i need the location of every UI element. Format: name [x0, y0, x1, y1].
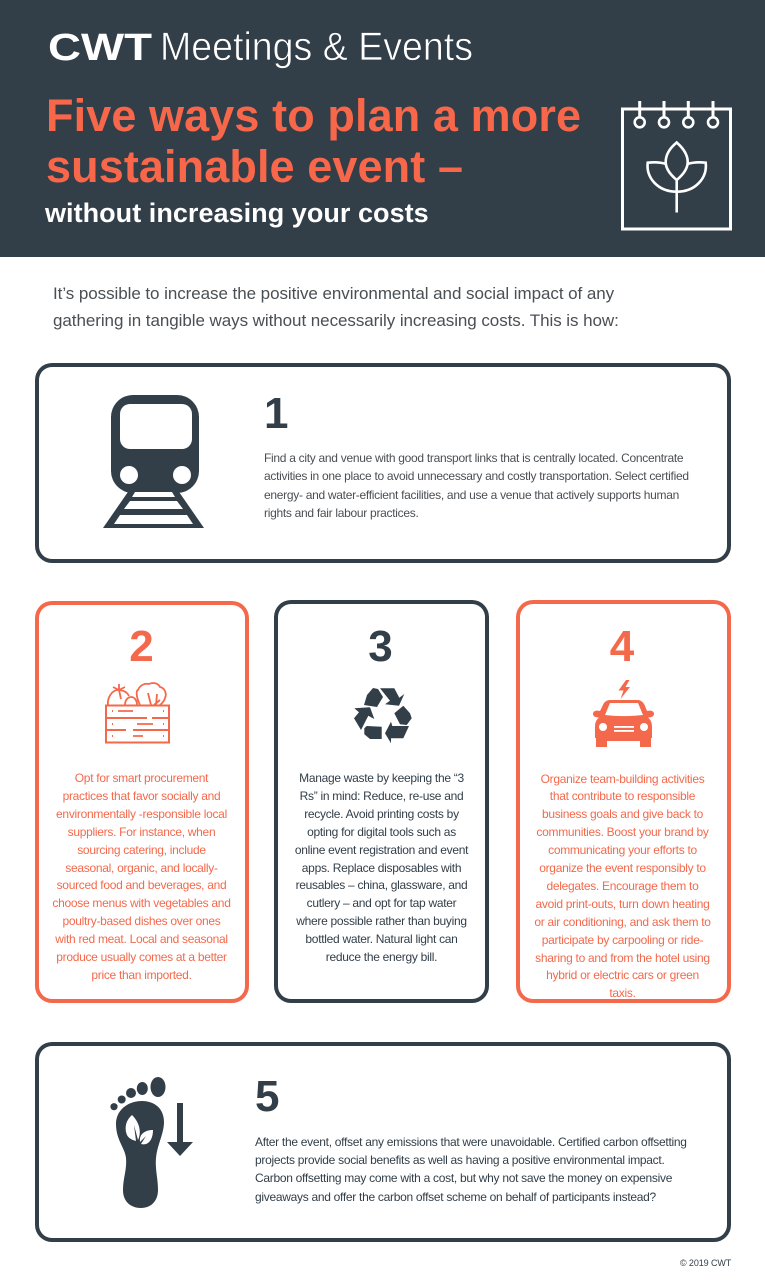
body text 4: taxis. — [609, 986, 636, 1000]
body text 2: Opt for smart procurement — [75, 771, 208, 785]
body text 2: environmentally -responsible local — [56, 807, 227, 821]
body text 1: energy- and water-efficient facilities, and use a venue that actively supports human — [264, 488, 679, 502]
body text 1: activities in one place to avoid unnecessary and costly transportation. Select certified — [264, 469, 689, 483]
body text 3: bottled water. Natural light can — [305, 932, 458, 946]
body text 4: Organize team-building activities — [541, 772, 704, 786]
body text 4: business goals and give back to — [542, 807, 703, 821]
body text 1: rights and fair labour practices. — [264, 506, 419, 520]
number 1: 1 — [264, 389, 288, 438]
body text 2: poultry-based dishes over ones — [62, 914, 221, 928]
icon: calendar with plant — [621, 101, 732, 230]
copyright footer: © 2019 CWT — [680, 1258, 731, 1268]
body text 5: Carbon offsetting may come with a cost, but why not save the money on expensive — [255, 1171, 672, 1185]
body text 4: participate by carpooling or ride- — [542, 933, 703, 947]
body text 4: that contribute to responsible — [550, 789, 695, 803]
panel 2: procurement — [35, 601, 249, 1003]
title: sustainable event – — [46, 140, 463, 192]
icon: footprint with leaves and down arrow — [110, 1077, 193, 1208]
body text 3: Rs” in mind: Reduce, re-use and — [300, 789, 463, 803]
body text 3: reduce the energy bill. — [326, 950, 437, 964]
body text 4: organize the event responsibly to — [539, 861, 706, 875]
body text 5 — [255, 1135, 687, 1204]
body text 3: reusables – china, glassware, and — [296, 878, 467, 892]
body text 2: choose menus with vegetables and — [52, 896, 231, 910]
body text 5: projects provide social benefits as well as having a positive environmental impact. — [255, 1153, 664, 1167]
number 4: 4 — [610, 622, 634, 671]
panel 5: carbon offset — [35, 1042, 731, 1242]
body text 3 — [295, 771, 468, 964]
body text 3: where possible rather than buying — [296, 914, 467, 928]
title: Five ways to plan a more — [46, 90, 581, 141]
icon: recycling arrows — [354, 688, 412, 744]
title — [46, 90, 581, 192]
number 3: 3 — [368, 622, 393, 671]
body text 4: delegates. Encourage them to — [546, 879, 698, 893]
body text 3: apps. Replace disposables with — [302, 861, 461, 875]
body text 4: communicating your efforts to — [548, 843, 697, 857]
body text 2: price than imported. — [91, 968, 192, 982]
panel 3: waste — [274, 600, 489, 1003]
body text 4: or air conditioning, and ask them to — [534, 915, 711, 929]
body text 4: hybrid or electric cars or green — [546, 968, 699, 982]
panel 4: team building — [516, 600, 731, 1003]
body text 2: seasonal, organic, and locally- — [65, 861, 218, 875]
icon: electric car — [593, 680, 654, 747]
intro text: It’s possible to increase the positive environmental and social impact of any — [53, 284, 614, 303]
icon: crate of vegetables — [105, 682, 170, 744]
body text 4: communities. Boost your brand by — [536, 825, 709, 839]
body text 2: produce usually comes at a better — [56, 950, 227, 964]
body text 2: suppliers. For instance, when — [68, 825, 215, 839]
body text 3: recycle. Avoid printing costs by — [304, 807, 459, 821]
body text 5: After the event, offset any emissions that were unavoidable. Certified carbon offsetting — [255, 1135, 687, 1149]
body text 3: cutlery – and opt for tap water — [307, 896, 456, 910]
header banner — [0, 0, 765, 257]
body text 4 — [534, 772, 711, 1000]
body text 2: with red meat. Local and seasonal — [55, 932, 228, 946]
body text 3: Manage waste by keeping the “3 — [299, 771, 464, 785]
body text 5: giveaways and offer the carbon offset scheme on behalf of participants instead? — [255, 1190, 656, 1204]
body text 2: sourcing catering, include — [77, 843, 206, 857]
panel 1: transport — [35, 363, 731, 563]
subtitle: without increasing your costs — [45, 198, 429, 228]
body text 3: online event registration and event — [295, 843, 468, 857]
body text 2: practices that favor socially and — [63, 789, 220, 803]
body text 2 — [52, 771, 231, 982]
number 2: 2 — [129, 622, 154, 671]
icon: train — [103, 395, 204, 528]
body text 4: sharing to and from the hotel using — [535, 951, 710, 965]
body text 2: sourced food and beverages, and — [57, 878, 226, 892]
logo: CWT Meetings & Events: CWT — [48, 27, 152, 69]
body text 1 — [264, 451, 689, 520]
intro text: gathering in tangible ways without necessarily increasing costs. This is how: — [53, 310, 619, 330]
body text 1: Find a city and venue with good transport links that is centrally located. Concentrate — [264, 451, 683, 465]
number 5: 5 — [255, 1072, 279, 1121]
body text 3: opting for digital tools such as — [307, 825, 456, 839]
intro text — [53, 284, 619, 330]
body text 4: avoid print-outs, turn down heating — [536, 897, 709, 911]
